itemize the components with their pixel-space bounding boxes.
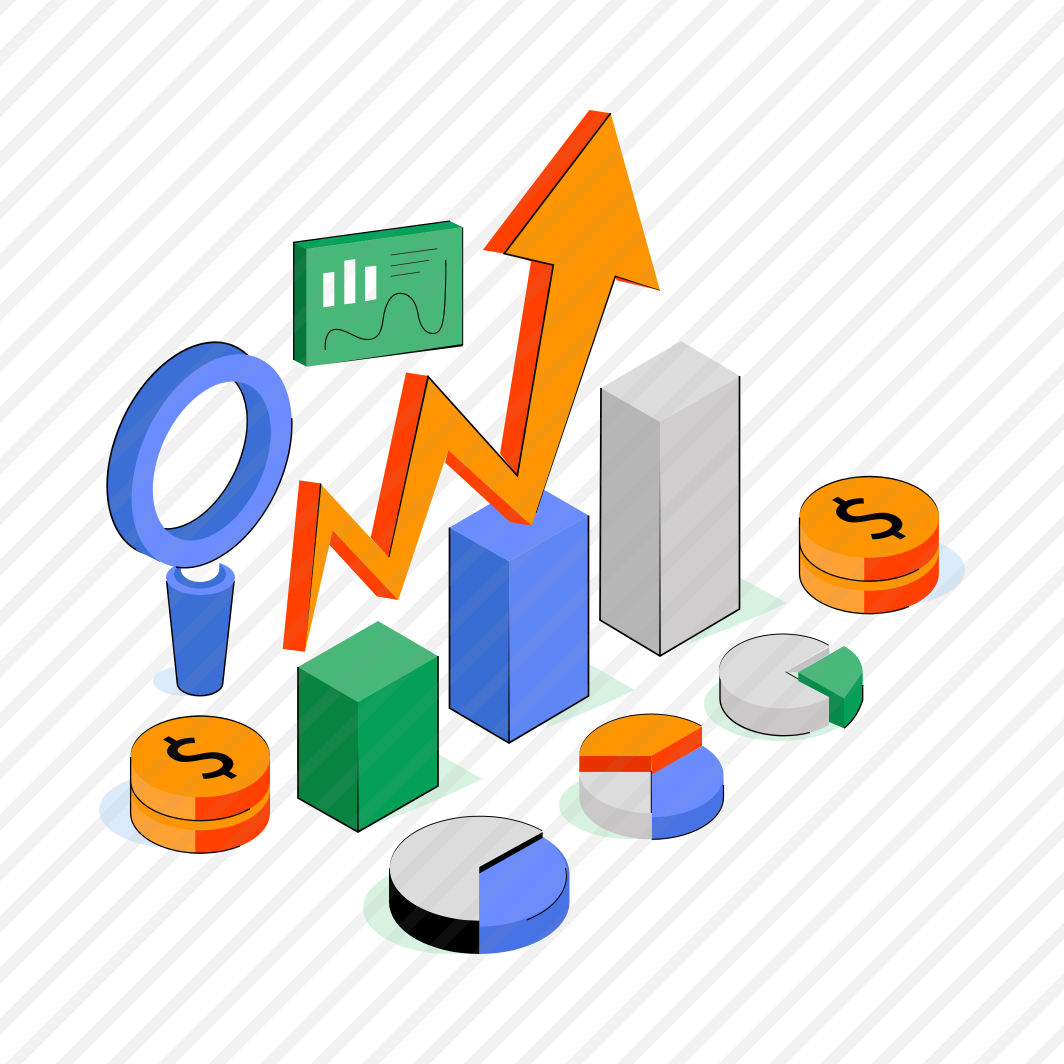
blue slice (479, 837, 570, 954)
coin stack left (123, 713, 270, 853)
pie chart bottom (389, 816, 570, 954)
green bar (298, 621, 438, 832)
dollar sign: $ (123, 713, 266, 796)
ring inner wall (129, 363, 294, 559)
pie chart middle (579, 714, 724, 839)
text lines (391, 249, 437, 276)
orange slice side (579, 756, 651, 771)
card front face (307, 227, 463, 367)
grey pie top (719, 634, 829, 708)
wedge cut wall (785, 647, 829, 672)
ring front face (100, 329, 324, 593)
rising arrow (283, 110, 660, 652)
green wedge (798, 646, 863, 728)
green dashboard card (294, 221, 463, 367)
dollar sign: $ (792, 474, 935, 557)
handle (166, 555, 235, 696)
magnifying glass (106, 341, 293, 696)
grey bar (600, 341, 740, 656)
ground shadows (99, 534, 965, 954)
grey slice top (390, 816, 543, 920)
ring back rim (75, 317, 299, 581)
blue slice (652, 746, 724, 839)
line chart curve (325, 260, 446, 350)
pie chart right (719, 634, 863, 736)
coin stack right (792, 474, 939, 614)
grey slice side (389, 868, 479, 954)
grey pie body (720, 671, 829, 736)
blue bar (450, 481, 588, 743)
card side face (294, 242, 307, 367)
card top face (294, 221, 463, 249)
mini bar chart (323, 259, 376, 307)
arrow outline (427, 113, 611, 476)
arrow red extrusion (283, 110, 660, 652)
grey slice (579, 771, 651, 839)
arrow orange face (305, 113, 660, 652)
orange slice top (579, 714, 702, 755)
lens opening (152, 382, 248, 530)
